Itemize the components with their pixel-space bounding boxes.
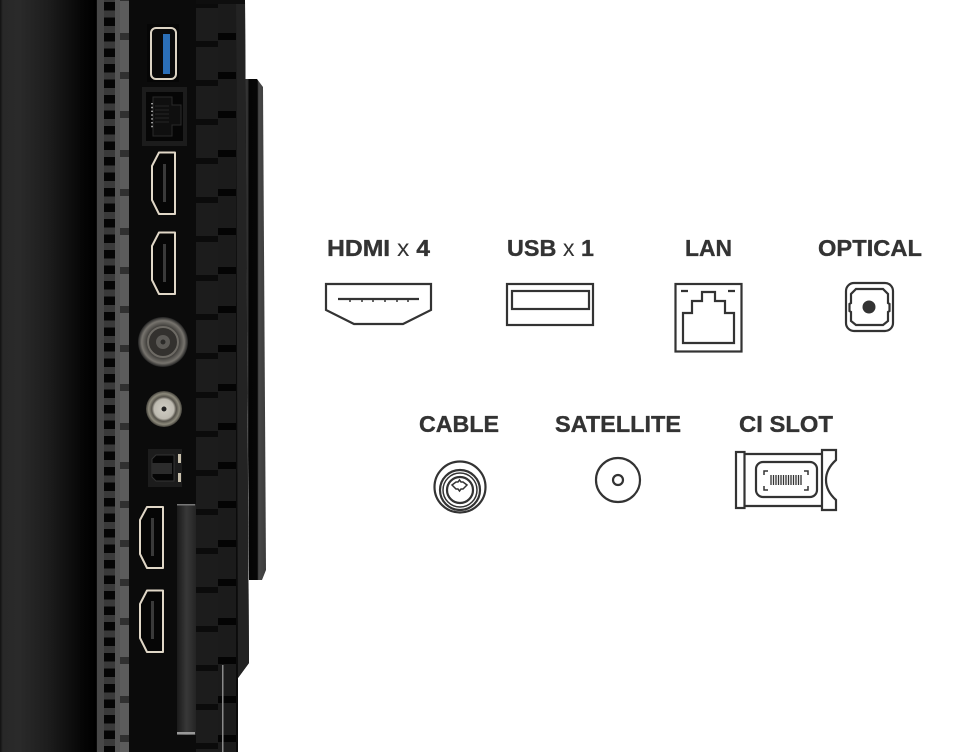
label: LAN [685,235,732,261]
ribbed right side [196,0,249,752]
port: satellite connector [146,391,182,427]
label: OPTICAL [818,235,922,261]
port: HDMI 2 [152,232,175,294]
icon: optical [846,283,893,331]
port: optical [148,449,182,487]
port: HDMI 4 [140,590,163,652]
icon: HDMI [326,284,431,324]
label: CABLE [419,411,499,437]
port: LAN [142,87,187,146]
block: OPTICAL [818,235,922,331]
port: HDMI 1 [152,152,175,214]
label: CI SLOT [739,411,834,437]
icon: CI slot [736,450,836,510]
CI card slot [177,504,196,735]
block: SATELLITE [555,411,681,502]
icon: satellite [596,458,640,502]
TV left surface [0,0,96,752]
block: CI SLOT [736,411,836,510]
icon: LAN [676,284,742,352]
label: HDMI x 4 [327,235,430,261]
label: USB x 1 [507,235,594,261]
port: HDMI 3 [140,507,163,568]
block: CABLE [419,411,499,512]
block: LAN [676,235,742,352]
icon: USB [507,284,593,325]
block: HDMI x 4 [326,235,431,324]
block: USB x 1 [507,235,594,325]
icon: cable [434,462,486,512]
label: SATELLITE [555,411,681,437]
vent strips [97,0,129,752]
port: cable connector [138,317,188,367]
TV side bump [245,79,266,580]
panel: TV rear side with connectors [0,0,266,752]
TV body silhouette [0,0,249,752]
light edge line [222,665,224,752]
port: USB [147,24,179,82]
